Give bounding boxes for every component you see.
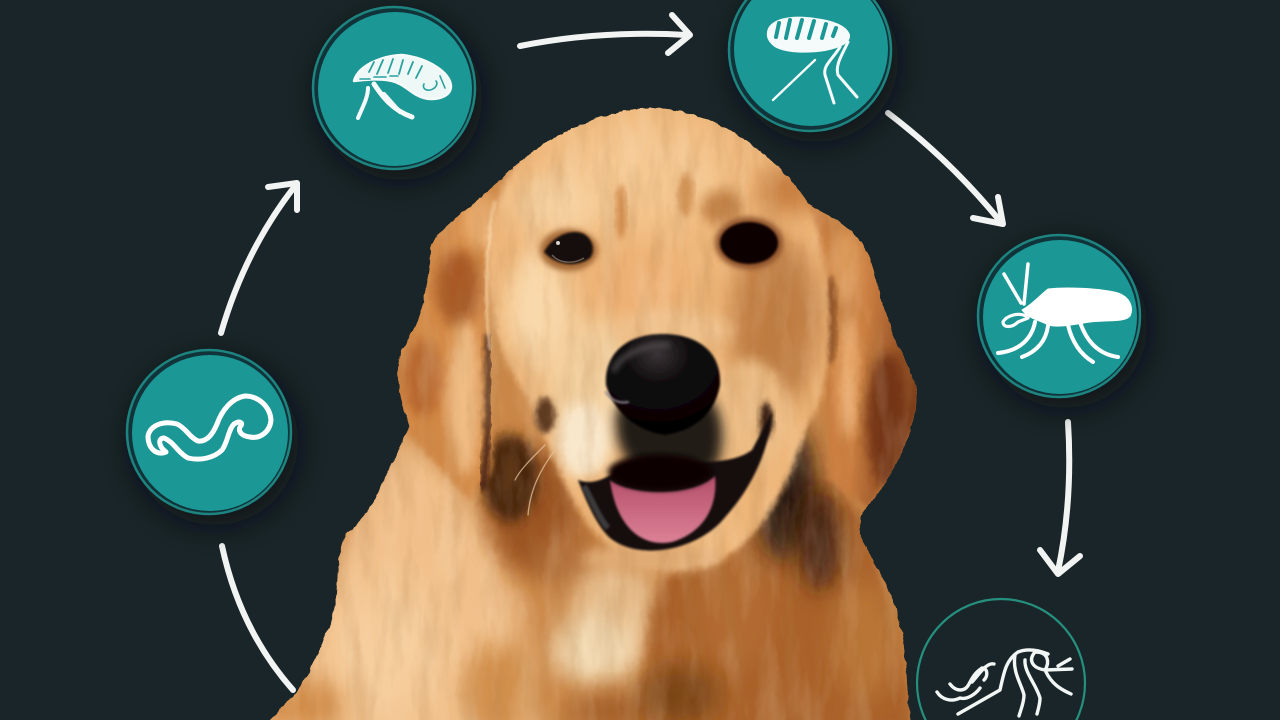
icon: curled larva outline: [937, 650, 1072, 716]
dog: right ear: [813, 207, 917, 508]
dog: chest: [551, 560, 685, 720]
arrow: left side: [221, 183, 297, 333]
dog: nose: [606, 334, 720, 435]
node: larva worm, left: [127, 350, 298, 525]
node: striped flea, top centre right: [729, 0, 898, 142]
dog: neck ruff: [482, 434, 604, 588]
dog: mouth and tongue: [578, 412, 772, 551]
dog: fur streak overlay: [240, 100, 930, 720]
dog: right eye: [715, 217, 783, 269]
arrow: lower left, tail only: [222, 546, 293, 690]
arrow: top, to second stage: [520, 15, 690, 53]
icon: white winged insect silhouette: [998, 264, 1132, 362]
icon: flea side view with patterned body: [354, 55, 451, 118]
dog: left shoulder: [260, 430, 540, 720]
dog: whiskers: [515, 445, 555, 515]
node: adult flea, top left: [313, 7, 482, 180]
arrow: right side: [1040, 422, 1080, 574]
dog: left ear: [392, 175, 502, 500]
icon: squiggly worm outline: [148, 396, 271, 459]
dog: face and forehead: [487, 95, 829, 569]
icon: striped flea with long legs: [768, 18, 857, 103]
dog: left eye: [540, 229, 598, 271]
dog: fur and face shading: [240, 95, 930, 720]
dog: right body: [640, 420, 925, 720]
dog: muzzle: [535, 310, 790, 572]
dog: dark area under nose: [616, 400, 722, 470]
node: pupa outline, bottom right: [917, 599, 1085, 720]
dog: [240, 95, 930, 720]
arrow: top right: [888, 113, 1003, 224]
node: white winged insect, right: [978, 235, 1147, 408]
dog: base coat: [240, 100, 930, 720]
